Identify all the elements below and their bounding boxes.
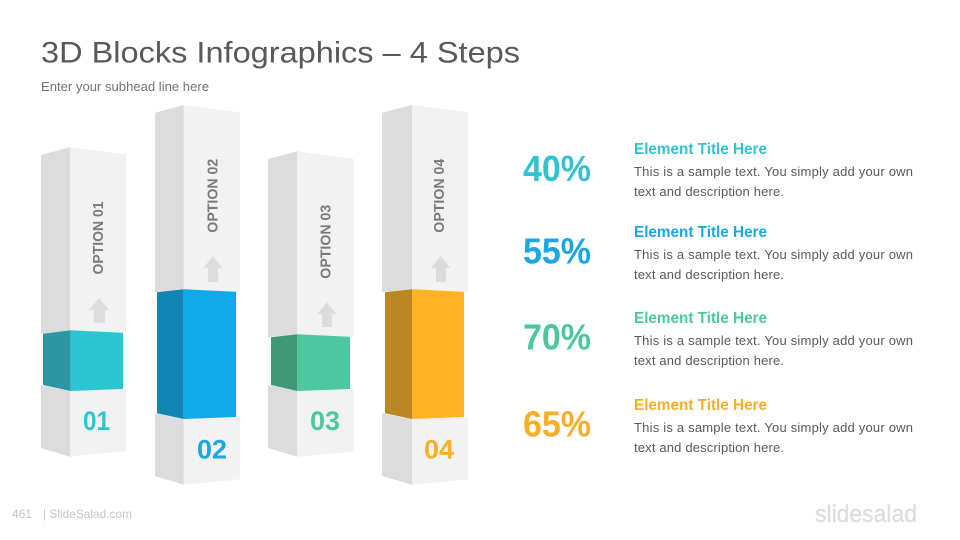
item 1: 40%: Element Title Here	[634, 141, 767, 158]
column: option 04: 04	[424, 434, 454, 464]
column: option 03	[268, 151, 354, 457]
footer: page number and site: 461	[12, 507, 32, 521]
item 3: 70%: text and description here.	[634, 353, 784, 368]
item 2: 55%: text and description here.	[634, 267, 784, 282]
item 2: 55%: Element Title Here	[634, 224, 767, 241]
title: 3D Blocks Infographics – 4 Steps	[41, 36, 520, 70]
column: option 01	[41, 147, 126, 457]
item 4: 65%: 65%	[523, 404, 591, 444]
item 2: 55%	[523, 224, 913, 282]
item 3: 70%	[523, 310, 913, 368]
column: option 04: OPTION 04	[431, 158, 448, 233]
column: option 03: OPTION 03	[318, 205, 334, 279]
column: option 02: 02	[197, 434, 227, 464]
item 4: 65%: text and description here.	[634, 440, 784, 455]
column: option 01: OPTION 01	[90, 202, 107, 274]
column: option 02: OPTION 02	[204, 159, 222, 233]
item 4: 65%	[523, 397, 913, 455]
item 3: 70%: 70%	[523, 316, 591, 358]
item 1: 40%: This is a sample text. You simply add your own	[634, 164, 913, 179]
item 3: 70%: Element Title Here	[634, 310, 767, 327]
footer: page number and site: | SlideSalad.com	[43, 507, 132, 521]
column: option 03: 03	[310, 406, 340, 436]
item 3: 70%: This is a sample text. You simply add your own	[634, 333, 913, 348]
item 2: 55%: 55%	[523, 230, 591, 272]
column: option 04	[382, 105, 468, 485]
logo: slidesalad: slidesalad	[815, 501, 917, 528]
column: option 02	[155, 105, 240, 485]
item 1: 40%: 40%	[523, 148, 591, 189]
column: option 01: 01	[83, 406, 110, 436]
item 4: 65%: This is a sample text. You simply add your own	[634, 420, 913, 435]
item 1: 40%: text and description here.	[634, 184, 784, 199]
subhead: Enter your subhead line here	[41, 80, 209, 94]
item 4: 65%: Element Title Here	[634, 397, 767, 414]
item 1: 40%	[523, 141, 913, 199]
item 2: 55%: This is a sample text. You simply add your own	[634, 247, 913, 262]
